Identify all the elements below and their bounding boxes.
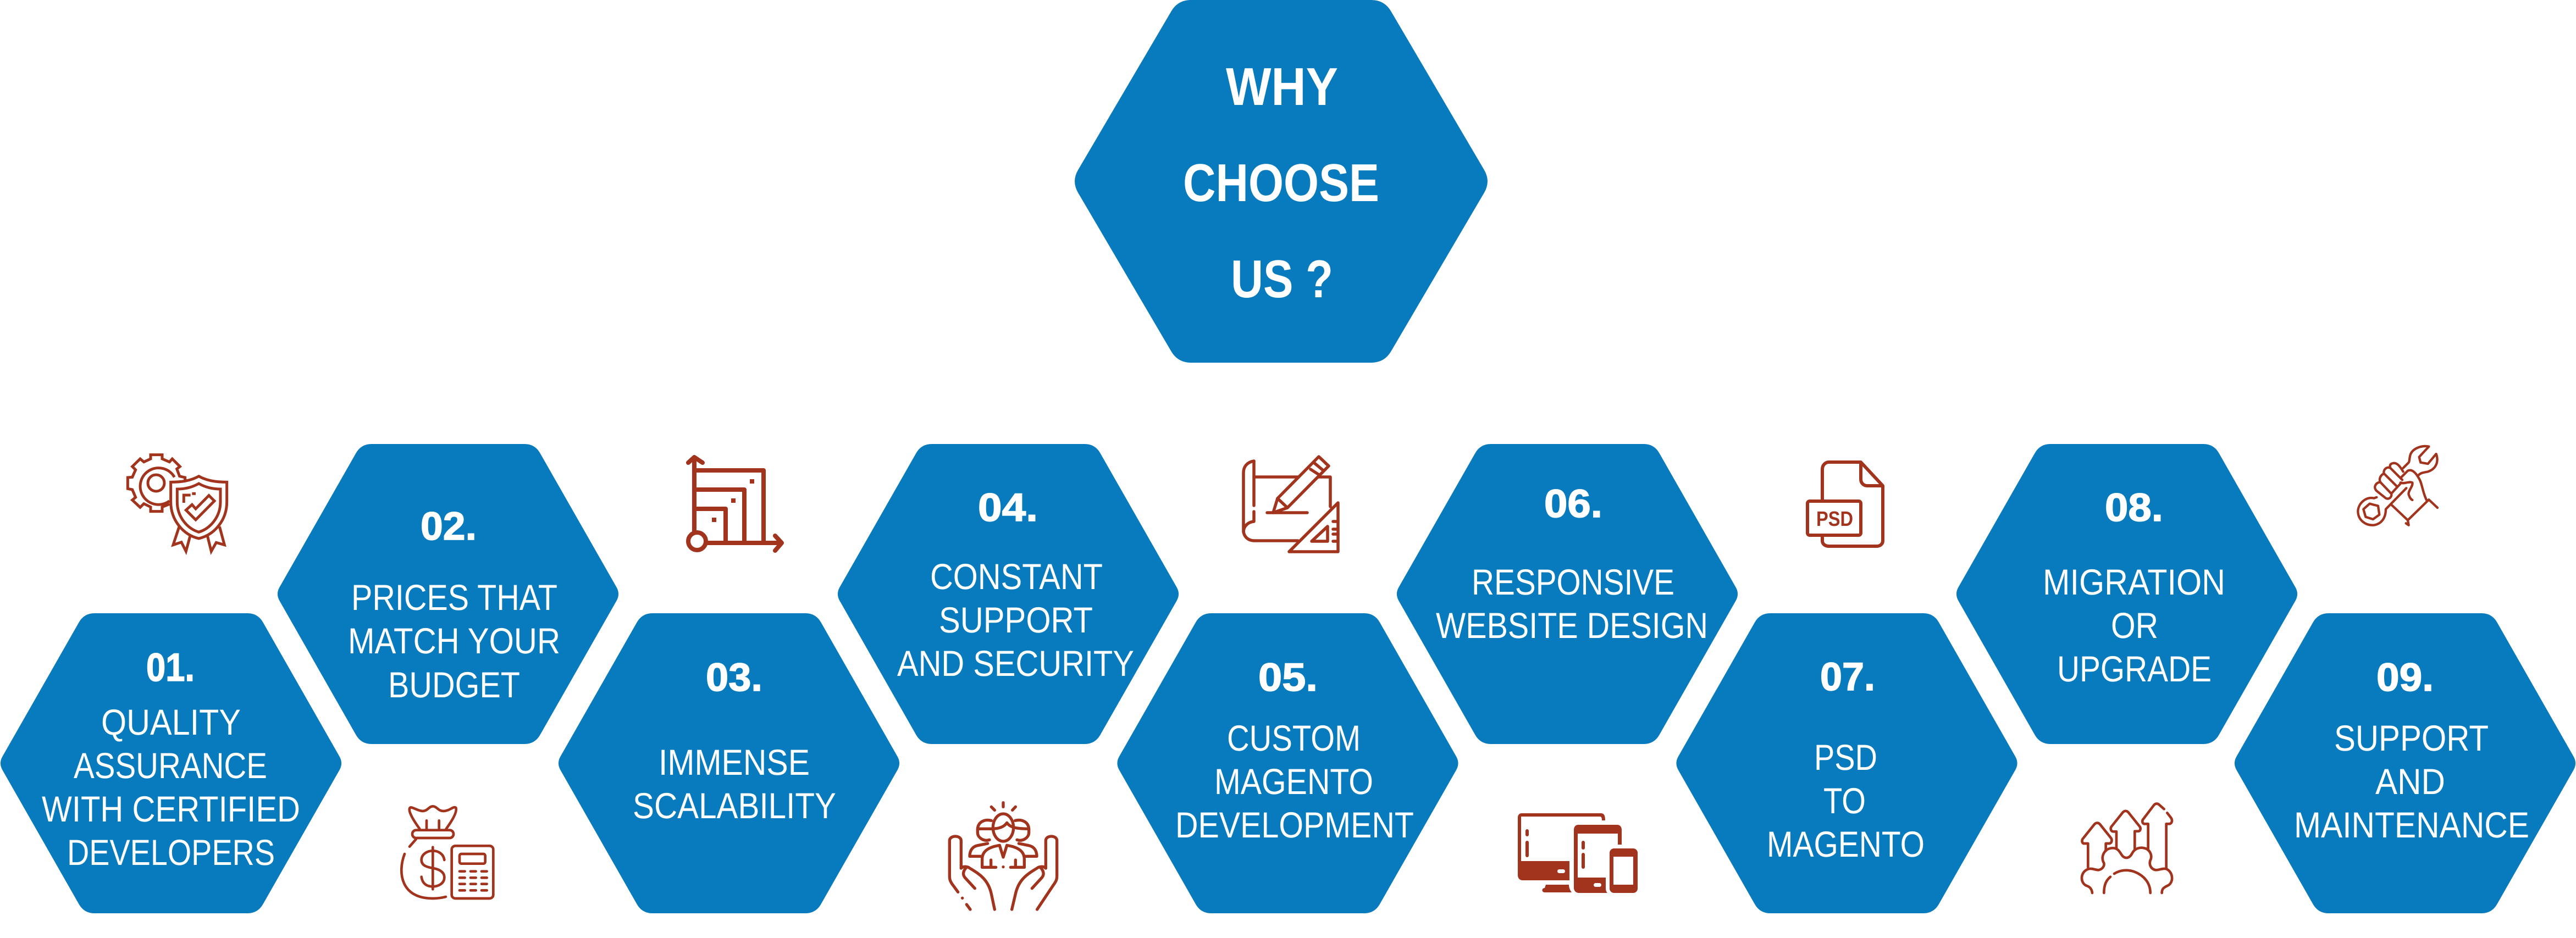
psd tag text: PSD bbox=[1816, 508, 1853, 531]
item 09: support and maintenance bbox=[2235, 613, 2575, 913]
file outline bbox=[1822, 462, 1883, 546]
number 06: 06. bbox=[1544, 482, 1602, 526]
label 05 bbox=[1175, 718, 1414, 845]
item 06: responsive design bbox=[1397, 444, 1738, 744]
item 04: support and security bbox=[838, 444, 1179, 744]
number 05: 05. bbox=[1258, 656, 1318, 700]
label 04: CONSTANT bbox=[930, 556, 1103, 597]
label 02: PRICES THAT bbox=[351, 577, 557, 618]
hexagon 02 bbox=[278, 444, 618, 744]
psd tag bbox=[1807, 501, 1861, 535]
label 02 bbox=[348, 577, 560, 705]
number 09: 09. bbox=[2376, 656, 2434, 700]
hexagon 01 bbox=[1, 613, 341, 913]
number 02: 02. bbox=[421, 504, 477, 548]
title text: WHY bbox=[1226, 57, 1338, 116]
item 05: custom development bbox=[1117, 613, 1458, 913]
monitor bbox=[1518, 813, 1605, 892]
number 08: 08. bbox=[2105, 486, 2163, 530]
title text bbox=[1183, 57, 1379, 309]
hexagon 08 bbox=[1956, 444, 2297, 744]
label 01: DEVELOPERS bbox=[67, 832, 275, 873]
item 07: psd to magento bbox=[1676, 613, 2017, 913]
title text: US ? bbox=[1231, 249, 1333, 309]
label 04: AND SECURITY bbox=[897, 643, 1134, 684]
icon: psd file bbox=[1807, 462, 1883, 546]
label 04 bbox=[897, 556, 1134, 684]
hexagon 05 bbox=[1117, 613, 1458, 913]
label 06: WEBSITE DESIGN bbox=[1436, 605, 1708, 646]
icon: hand holding wrench bbox=[2358, 446, 2437, 525]
hexagon 04 bbox=[838, 444, 1179, 744]
title hexagon shape bbox=[1075, 0, 1488, 363]
number 03: 03. bbox=[706, 656, 762, 700]
label 07: TO bbox=[1823, 780, 1866, 821]
label 05: CUSTOM bbox=[1227, 718, 1361, 758]
number 07: 07. bbox=[1820, 655, 1875, 699]
icon: money bag and calculator bbox=[401, 806, 493, 898]
label 09: SUPPORT bbox=[2334, 718, 2489, 758]
icon: blueprint with pencil and set square bbox=[1243, 457, 1338, 552]
item 03: scalability bbox=[559, 613, 899, 913]
label 09 bbox=[2294, 718, 2529, 845]
label 06: RESPONSIVE bbox=[1472, 562, 1674, 602]
phone bbox=[1610, 848, 1638, 893]
title hexagon: why choose us bbox=[1075, 0, 1488, 363]
icon: arrows rising from gear bbox=[2082, 803, 2172, 893]
label 03: IMMENSE bbox=[659, 742, 810, 782]
label 04: SUPPORT bbox=[939, 600, 1093, 640]
number 04: 04. bbox=[978, 486, 1038, 530]
item 08: migration or upgrade bbox=[1956, 444, 2297, 744]
icon: scalability chart bbox=[688, 457, 782, 551]
label 02: BUDGET bbox=[388, 664, 520, 705]
label 01 bbox=[42, 702, 300, 873]
label 07: MAGENTO bbox=[1767, 824, 1925, 864]
label 03 bbox=[633, 742, 836, 826]
item 02: prices bbox=[278, 444, 618, 744]
icon: responsive devices bbox=[1518, 813, 1638, 893]
label 08: MIGRATION bbox=[2043, 562, 2225, 602]
label 01: ASSURANCE bbox=[74, 745, 267, 786]
item 01: quality assurance bbox=[1, 613, 341, 913]
label 09: MAINTENANCE bbox=[2294, 804, 2529, 845]
label 07 bbox=[1767, 737, 1925, 864]
hexagon 09 bbox=[2235, 613, 2575, 913]
label 09: AND bbox=[2375, 761, 2445, 802]
label 01: WITH CERTIFIED bbox=[42, 789, 300, 829]
label 01: QUALITY bbox=[101, 702, 241, 742]
icon: gear and shield bbox=[128, 455, 227, 551]
label 08 bbox=[2043, 562, 2225, 689]
label 08: UPGRADE bbox=[2057, 648, 2212, 689]
label 05: MAGENTO bbox=[1214, 761, 1373, 802]
label 08: OR bbox=[2111, 605, 2158, 646]
label 02: MATCH YOUR bbox=[348, 620, 560, 661]
number 01: 01. bbox=[146, 646, 195, 690]
tablet bbox=[1574, 825, 1622, 893]
hexagon 07 bbox=[1676, 613, 2017, 913]
label 07: PSD bbox=[1814, 737, 1877, 778]
label 03: SCALABILITY bbox=[633, 785, 836, 826]
icon: team held in hands bbox=[949, 803, 1057, 909]
hexagon 06 bbox=[1397, 444, 1738, 744]
title text: CHOOSE bbox=[1183, 153, 1379, 213]
label 06 bbox=[1436, 562, 1708, 646]
label 05: DEVELOPMENT bbox=[1175, 804, 1414, 845]
hexagon 03 bbox=[559, 613, 899, 913]
